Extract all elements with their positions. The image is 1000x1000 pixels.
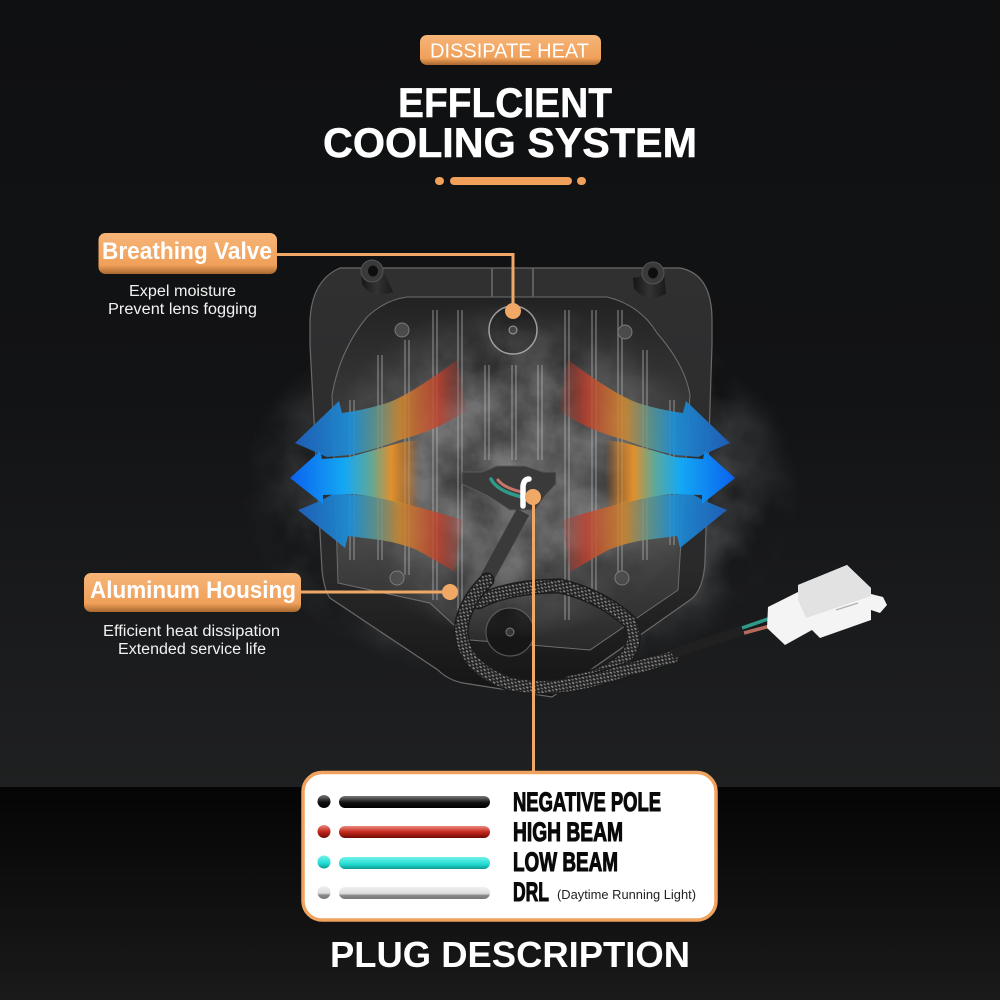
text: aluminum housing description: Efficient heat dissipation: [103, 623, 280, 640]
mounting screws: [390, 323, 632, 585]
upper right arrow: [558, 360, 730, 457]
label: breathing valve: [98, 233, 277, 274]
callout leader: breathing valve: [277, 254, 521, 319]
heat shrink tube: [672, 631, 742, 654]
row: high beam: HIGH BEAM: [513, 817, 623, 847]
lower mount disc: [486, 608, 534, 656]
callout leader: aluminum housing: [301, 584, 458, 600]
connector wires: [742, 619, 770, 633]
row: negative pole: [318, 787, 661, 817]
title divider: [435, 177, 586, 185]
badge: dissipate heat: [420, 35, 601, 65]
badge: dissipate heat: DISSIPATE HEAT: [430, 40, 589, 62]
white connector plug: [767, 565, 887, 645]
row: drl: [318, 877, 696, 907]
row: drl: (Daytime Running Light): [557, 888, 696, 902]
callout leader: plug description: [525, 489, 541, 772]
plug latch slot: [836, 603, 858, 610]
colored wires: [491, 479, 529, 506]
label: breathing valve: Breathing Valve: [102, 238, 272, 265]
plug body: [767, 565, 887, 645]
text: breathing valve description: Prevent lens fogging: [108, 301, 257, 318]
mounting post left: [361, 260, 393, 295]
row: negative pole: NEGATIVE POLE: [513, 787, 661, 817]
rubber cable: [487, 512, 523, 578]
cable plate: [462, 466, 556, 510]
text: breathing valve description: Expel moisture: [129, 283, 236, 300]
housing shell: [310, 268, 712, 697]
text: breathing valve description: [108, 283, 257, 318]
wiring harness: [461, 479, 770, 687]
breathing valve: [489, 306, 537, 354]
smoke: [268, 388, 784, 652]
mounting post right: [633, 262, 666, 298]
heat flow arrows right: [558, 360, 735, 572]
heading: plug description: PLUG DESCRIPTION: [330, 934, 690, 975]
row: low beam: LOW BEAM: [513, 847, 618, 877]
headlight housing: [310, 260, 712, 697]
heat flow arrows left: [290, 360, 467, 572]
middle left arrow: [290, 440, 420, 507]
text: aluminum housing description: Extended service life: [118, 641, 266, 658]
top vent tab: [492, 268, 533, 297]
row: high beam: [318, 817, 623, 847]
middle right arrow: [605, 440, 735, 507]
label: aluminum housing: Aluminum Housing: [90, 577, 296, 604]
braided sleeve: [461, 580, 673, 687]
recessed fin area: [332, 297, 690, 650]
upper left arrow: [295, 360, 467, 457]
label: aluminum housing: [84, 573, 301, 612]
lower left arrow: [298, 494, 463, 572]
text: aluminum housing description: [103, 623, 280, 658]
smoke over housing: [348, 313, 686, 630]
cooling fins: [350, 310, 674, 620]
title: [323, 79, 697, 166]
title: EFFLCIENT: [398, 79, 612, 126]
panel: plug legend: [303, 772, 716, 920]
plug top face: [798, 565, 871, 618]
title: COOLING SYSTEM: [323, 119, 697, 166]
row: low beam: [318, 847, 618, 877]
row: drl: DRL: [513, 877, 549, 907]
lower right arrow: [562, 494, 727, 572]
